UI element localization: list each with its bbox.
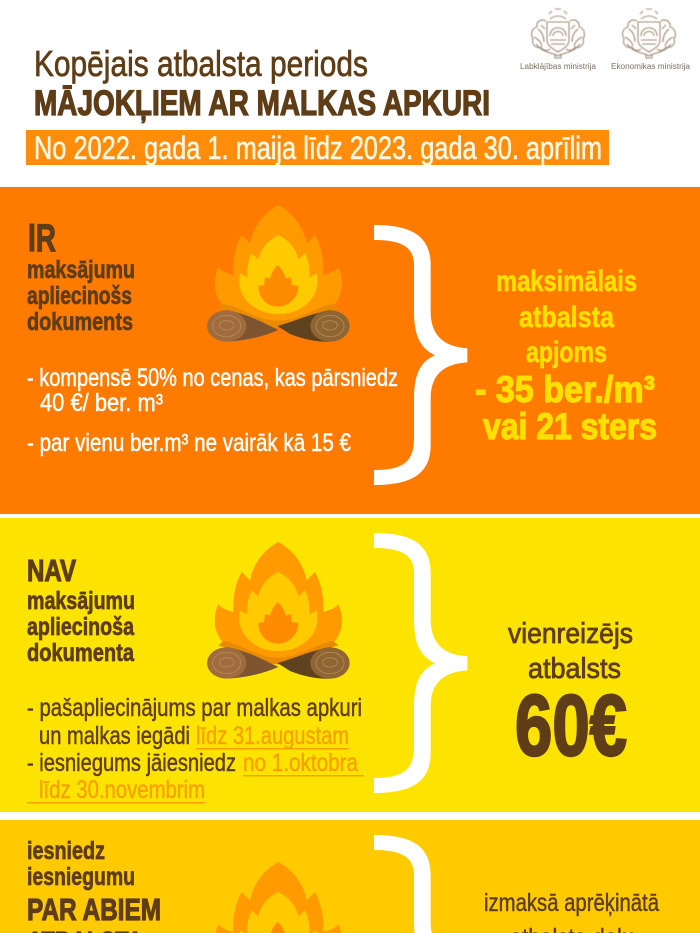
brace [374,835,467,933]
panel 1 result: maksimālais [496,265,637,298]
panel 2 result [508,618,633,774]
panel 1 heading: dokuments [27,308,133,336]
logo: Labklājības ministrija: Labklājības ministrija [520,62,597,71]
brace [374,225,467,485]
panel 2 conditions: no 1.oktobra [243,749,358,777]
panel 1 result [475,265,657,447]
panel 1 result: - 35 ber./m³ [475,369,655,410]
panel 2 result: vienreizējs [508,618,633,650]
panel 1 heading: apliecinošs [27,282,132,310]
panel 2 heading: NAV [27,553,76,588]
panel: iesniedz iesniegumu par abiem [0,820,700,933]
panel 1 conditions [27,364,398,457]
panel 3 heading: iesniedz [27,837,105,865]
panel 3 heading [27,837,161,933]
panel 3 result: izmaksā aprēķinātā [484,889,659,917]
panel 2 heading: apliecinoša [27,613,135,641]
panel 1 conditions: - kompensē 50% no cenas, kas pārsniedz [27,364,398,392]
panel 2 conditions [27,694,364,804]
title: Kopējais atbalsta periods [34,43,368,84]
panel 2 heading: dokumenta [27,639,135,667]
icon: campfire [207,205,350,342]
panel 1 heading: IR [28,217,56,260]
panel 3 heading: iesniegumu [27,863,135,891]
panel 2 result: 60€ [515,678,627,774]
panel 1 heading [27,217,135,336]
panel 1 heading: maksājumu [27,256,135,284]
panel 2 conditions: - pašapliecinājums par malkas apkuri [27,694,362,722]
logo: Labklājības ministrija [520,9,597,71]
panel 1 conditions: 40 €/ ber. m³ [40,389,163,417]
icon: campfire [207,542,350,679]
panel 2 heading [27,553,135,667]
panel 2 conditions: un malkas iegādi [39,722,190,750]
logo: Ekonomikas ministrija [611,9,691,71]
title: MĀJOKĻIEM AR MALKAS APKURI [34,84,490,123]
panel 2 conditions: līdz 31.augustam [196,722,349,750]
logo: Ekonomikas ministrija: Ekonomikas ministrija [611,62,691,71]
panel 3 heading: PAR ABIEM [27,892,161,927]
panel 3 result [484,889,659,933]
panel 1 result: vai 21 sters [483,406,657,447]
panel: NAV maksājumu apliecinoša dokumenta [0,518,700,812]
panel 1 result: atbalsta [519,301,614,334]
panel 2 result: atbalsts [528,653,621,685]
header background [0,0,700,187]
icon: campfire [207,862,350,933]
panel: IR maksājumu apliecinošs dokuments [0,187,700,514]
brace [374,533,467,793]
panel 2 heading: maksājumu [27,587,135,615]
panel 1 conditions: - par vienu ber.m³ ne vairāk kā 15 € [27,429,351,457]
panel 2 conditions: līdz 30.novembrim [39,776,205,804]
title [34,43,490,123]
panel 2 conditions: - iesniegums jāiesniedz [27,749,236,777]
panel 1 result: apjoms [526,336,607,369]
